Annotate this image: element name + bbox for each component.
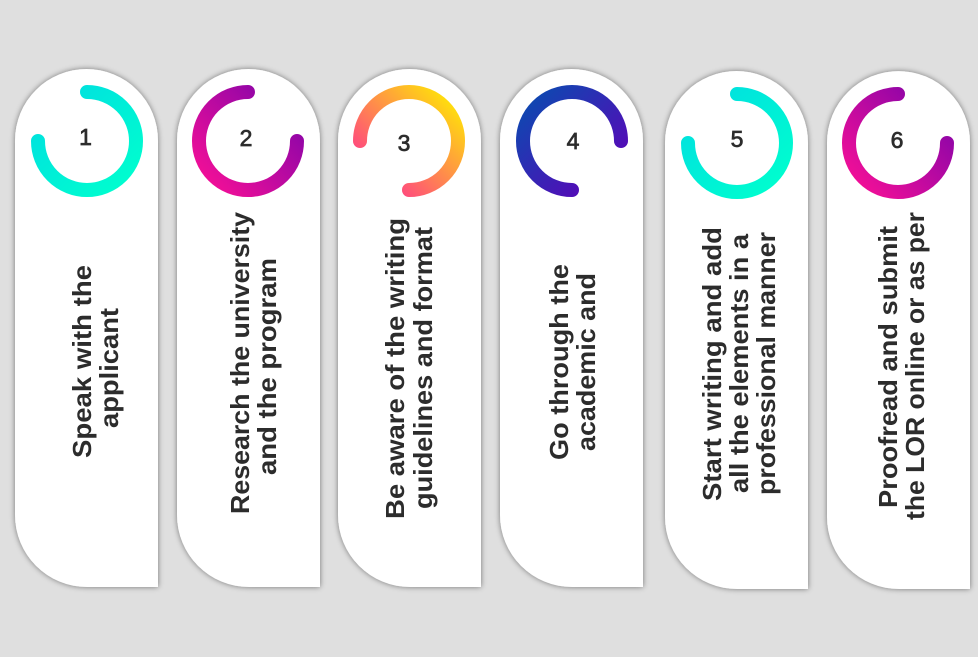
text: step 1: Speak with the [67,265,97,458]
icon: ring 4 [523,92,621,190]
text: step 2 [225,211,282,514]
card 6 [827,71,970,589]
card 5 [665,71,808,589]
card 2 [177,69,320,587]
card 3 [338,69,481,587]
text: step 5 [697,227,781,501]
panel: step 2 [177,69,320,587]
icon: ring 3 [360,92,458,190]
text: step 3 [380,218,438,519]
panel: step 1 [15,69,158,587]
number 5: 5 [731,126,743,152]
text: step 4 [544,264,601,460]
card 1 [15,69,158,587]
number 3: 3 [398,130,410,156]
text: step 3: Be aware of the writing [380,218,410,519]
text: step 2: Research the university [225,211,255,514]
card 4 [500,69,643,587]
text: step 6 [873,212,930,520]
icon: ring 2 [199,92,297,190]
icon: ring 6 [849,94,947,192]
number 4: 4 [567,128,580,154]
panel: step 4 [500,69,643,587]
text: step 5: professional manner [751,232,781,495]
number 6: 6 [891,127,903,153]
icon: ring 1 [38,92,136,190]
number 2: 2 [240,125,252,151]
panel: step 3 [338,69,481,587]
text: step 1 [67,265,124,458]
panel: step 5 [665,71,808,589]
text: step 6: Proofread and submit [873,226,903,508]
text: step 2: and the program [252,258,282,475]
text: step 3: guidelines and format [408,227,438,509]
panel: step 6 [827,71,970,589]
number 1: 1 [79,124,92,150]
text: step 4: Go through the [544,264,574,460]
text: step 5: all the elements in a [724,233,754,493]
text: step 1: applicant [94,308,124,428]
text: step 6: the LOR online or as per [900,212,930,520]
text: step 5: Start writing and add [697,227,727,501]
icon: ring 5 [688,94,786,192]
text: step 4: academic and [571,273,601,451]
